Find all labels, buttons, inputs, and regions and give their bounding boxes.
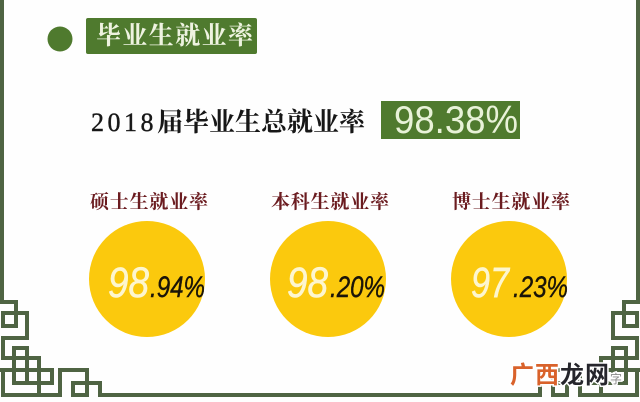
value: master: [108, 259, 205, 307]
section heading: [86, 18, 257, 54]
watermark: 广西龙网字: [510, 362, 623, 389]
value: doctor: .23%: [513, 271, 568, 304]
circle: master: [89, 221, 205, 337]
value: doctor: 97: [471, 259, 511, 307]
value: bachelor: .20%: [330, 271, 385, 304]
value: master: 98: [108, 259, 149, 307]
overall rate value: 98.38%: [394, 99, 518, 142]
label: doctor: 博士生就业率: [452, 190, 571, 213]
value: bachelor: [287, 259, 385, 307]
label: master: 硕士生就业率: [90, 191, 209, 213]
value: bachelor: 98: [287, 259, 328, 307]
overall rate title: 2018届毕业生总就业率: [91, 108, 366, 137]
section heading: 毕业生就业率: [96, 22, 254, 50]
label: bachelor: 本科生就业率: [271, 191, 390, 213]
section bullet: [48, 26, 72, 52]
circle: bachelor: [270, 221, 386, 337]
value: doctor: [471, 259, 568, 307]
circle: doctor: [451, 221, 567, 337]
value: master: .94%: [150, 271, 205, 304]
